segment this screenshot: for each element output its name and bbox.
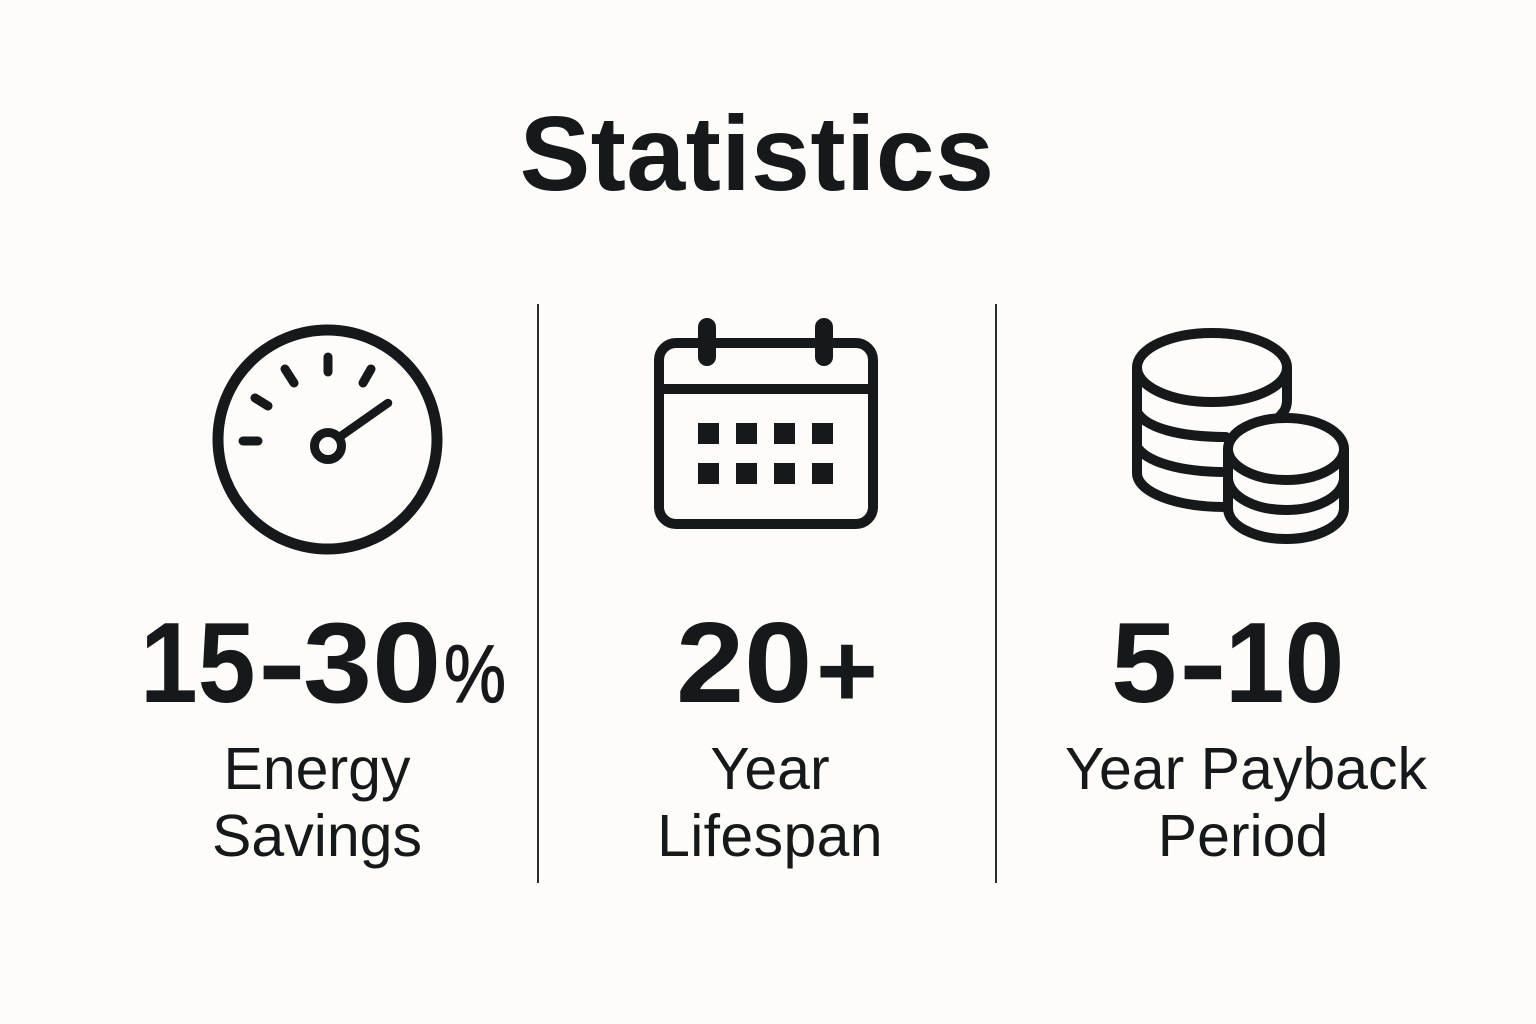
text: % [444, 629, 506, 720]
divider right [995, 304, 997, 883]
label: Energy Savings [212, 736, 422, 869]
label: Year Payback Period: Year Payback [1065, 736, 1427, 802]
label: Year Payback Period [1065, 736, 1427, 869]
text: 30 [303, 600, 441, 727]
text: 5 [1110, 600, 1176, 727]
label: Year Lifespan: Lifespan [657, 803, 883, 869]
divider left [537, 304, 539, 883]
label: Energy Savings: Energy [224, 736, 410, 802]
stat: 5-10 [1110, 600, 1344, 727]
text: 15 [140, 600, 255, 727]
text: 10 [1225, 600, 1344, 727]
label: Year Lifespan [657, 736, 883, 869]
stat: 15-30% [140, 600, 506, 727]
stat: 20+ [676, 600, 878, 730]
icon: calendar [659, 327, 873, 524]
label: Energy Savings: Savings [212, 803, 422, 869]
text: - [258, 600, 306, 727]
text: 20 [676, 600, 812, 727]
label: Year Payback Period: Period [1158, 803, 1328, 869]
icon: gauge [218, 330, 437, 549]
text: + [816, 612, 878, 730]
icon: coin stacks [1137, 333, 1344, 539]
text: - [1179, 600, 1227, 727]
label: Year Lifespan: Year [710, 736, 830, 802]
title: Statistics [520, 95, 994, 213]
